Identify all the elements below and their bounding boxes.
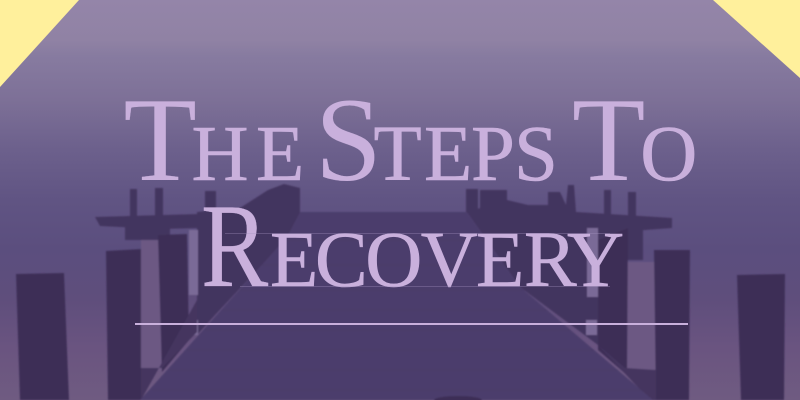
pier deck	[140, 212, 653, 400]
yellow corner: top right	[713, 0, 800, 78]
posts	[16, 228, 785, 400]
title underline	[135, 323, 688, 325]
yellow corner: top left	[0, 0, 79, 87]
title line 2: ECOVERY	[270, 217, 624, 304]
title hairlines	[225, 234, 610, 286]
title line 2: R	[201, 179, 268, 312]
title line 2	[201, 179, 624, 312]
title line 1: THE STEPS TO	[124, 73, 697, 206]
light gaps in structure	[189, 228, 598, 335]
deck planks	[152, 240, 641, 390]
pier right structure	[466, 185, 672, 375]
water gaps between posts	[141, 240, 655, 370]
deck dark blob	[434, 396, 482, 400]
pier left structure	[95, 184, 300, 335]
photo: jetty silhouette	[16, 184, 785, 400]
pier undersides	[141, 300, 656, 400]
title	[124, 73, 697, 312]
